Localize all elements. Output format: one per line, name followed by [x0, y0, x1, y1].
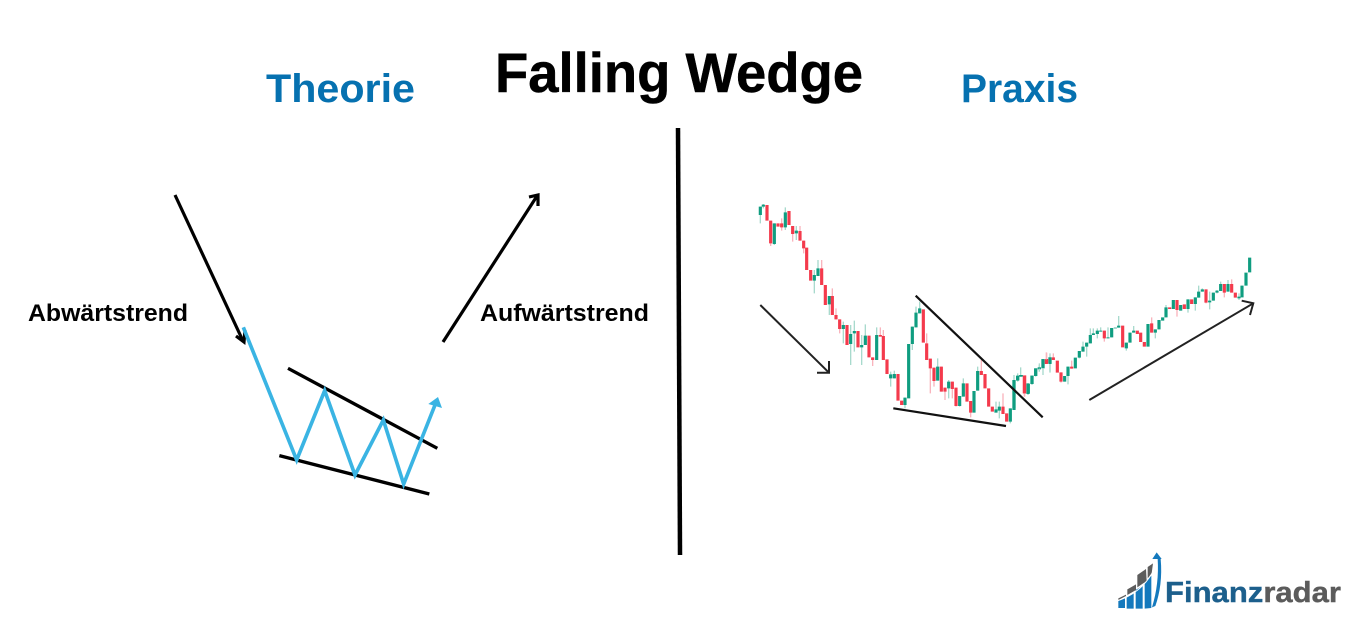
blue bars: [1118, 576, 1151, 609]
heading: Theorie: Theorie: [266, 67, 415, 111]
centre divider: [678, 128, 680, 555]
arrow: uptrend: [443, 195, 538, 342]
title: Falling Wedge: [495, 41, 863, 104]
grey bars: [1118, 563, 1153, 600]
logo wordmark: Finanzradar: [1165, 577, 1341, 609]
rising arrow: [1152, 552, 1162, 607]
wedge upper line: [288, 368, 437, 448]
heading: Praxis: Praxis: [961, 67, 1078, 111]
swoosh: [1114, 568, 1155, 602]
arrow: practice uptrend: [1089, 301, 1253, 400]
logo icon: [1114, 552, 1162, 609]
arrow: practice downtrend: [760, 305, 829, 373]
arrow: downtrend: [175, 195, 245, 342]
wedge lines: practice: [893, 296, 1043, 426]
price zigzag: [243, 327, 435, 484]
wedge diagram: theory: [243, 327, 442, 494]
wedge lower line: [279, 456, 429, 494]
label: Abwärtstrend: Abwärtstrend: [28, 300, 188, 327]
logo: Finanzradar: [1114, 552, 1341, 609]
zigzag arrowhead: [428, 397, 442, 408]
candles: rising section: [1014, 258, 1250, 410]
label: Aufwärtstrend: Aufwärtstrend: [480, 300, 649, 327]
candles: falling section: [760, 204, 1050, 423]
candlestick chart: practice: [760, 204, 1253, 426]
